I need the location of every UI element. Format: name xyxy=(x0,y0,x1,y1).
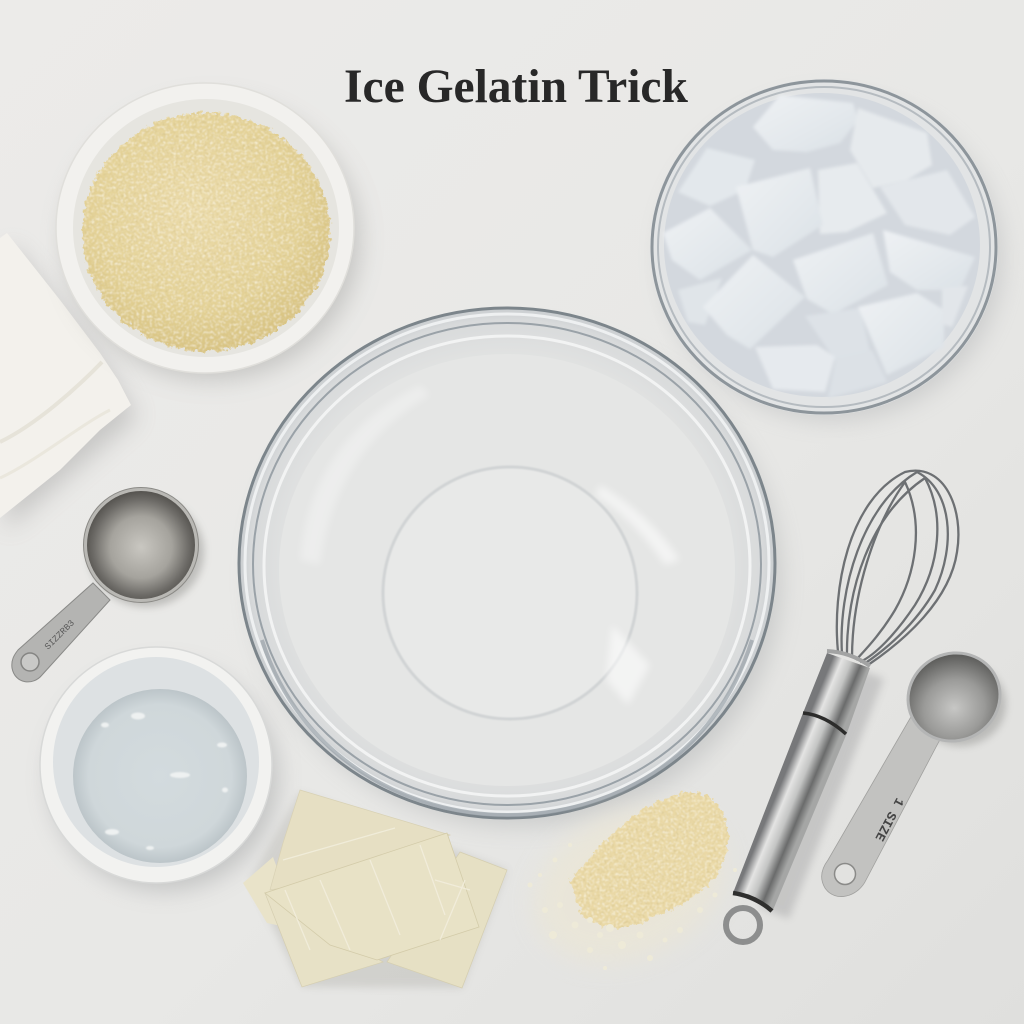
gelatin sheets xyxy=(243,790,507,988)
spoon engraving: 1 SIZE xyxy=(871,795,907,844)
large glass mixing bowl xyxy=(238,307,781,826)
cup engraving: SIZZRB3 xyxy=(43,618,77,652)
whisk handle xyxy=(726,651,870,942)
title: Ice Gelatin Trick xyxy=(344,61,689,113)
scattered grains xyxy=(528,843,737,970)
bowl base ring xyxy=(383,467,637,719)
glass highlights xyxy=(300,385,680,705)
metal measuring cup xyxy=(12,488,204,682)
water with bloom flakes xyxy=(73,689,247,863)
ice cubes xyxy=(663,95,975,398)
water ramekin xyxy=(40,647,278,890)
gelatin powder bowl xyxy=(56,83,360,380)
mound xyxy=(570,792,728,928)
metal measuring spoon xyxy=(822,636,1017,897)
bowl of ice cubes xyxy=(650,79,1002,420)
wire whisk xyxy=(726,471,958,942)
towel xyxy=(0,233,137,530)
gelatin powder pile xyxy=(509,777,751,993)
granulated gelatin xyxy=(82,113,330,351)
whisk wires xyxy=(837,471,958,665)
